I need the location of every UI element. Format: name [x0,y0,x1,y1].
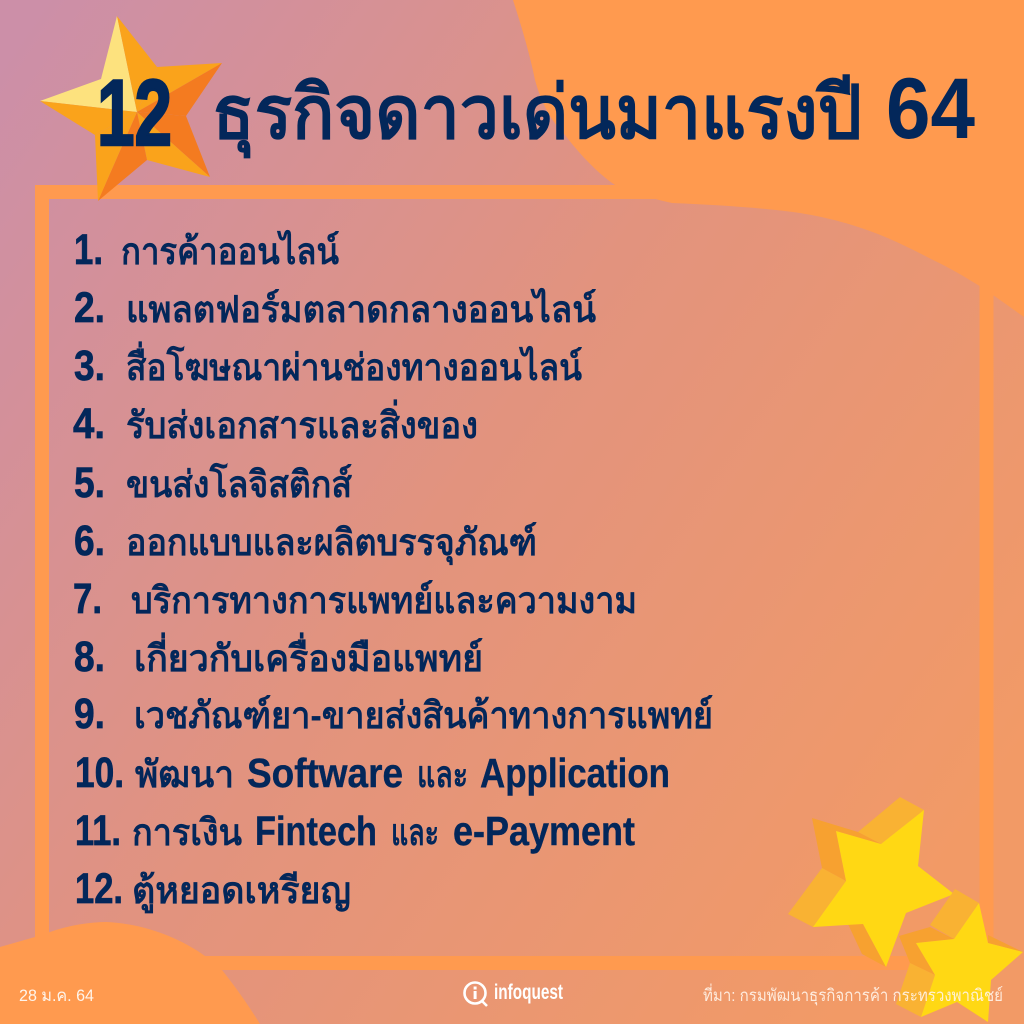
panel frame [42,192,986,963]
item 11: การเงิน [132,812,242,853]
item 5: 5. [74,459,105,507]
item 11: 11. [75,807,121,855]
icon: large yellow 3D star [788,797,954,967]
item 7: บริการทางการแพทย์และความงาม [131,580,637,621]
item 8: 8. [74,633,105,681]
item 4: รับส่งเอกสารและสิ่งของ [126,399,478,446]
orange blob: bottom left [0,922,260,1024]
item 9: เวชภัณฑ์ยา-ขายส่งสินค้าทางการแพทย์ [134,695,713,736]
title: ธุรกิจดาวเด่นมาแรงปี [212,71,862,159]
item 10: และ [417,754,468,795]
title [97,60,975,165]
ranked list of 12 businesses [73,226,713,914]
item 11: e-Payment [453,808,635,854]
item 2: 2. [74,284,105,332]
item 2: แพลตฟอร์มตลาดกลางออนไลน์ [126,287,596,330]
item 6: ออกแบบและผลิตบรรจุภัณฑ์ [126,522,537,566]
item 10: Application [480,750,670,796]
item 11: Fintech [255,808,377,854]
item 1: 1. [74,226,103,274]
title: 64 [886,61,975,157]
item 6: 6. [74,517,105,565]
item 1: การค้าออนไลน์ [121,229,339,272]
icon: faceted star [40,16,222,201]
logo: infoquest [464,981,563,1006]
item 12: ตู้หยอดเหรียญ [132,870,351,914]
item 4: 4. [73,400,105,448]
item 10: Software [247,750,403,796]
item 3: 3. [74,342,105,390]
item 9: 9. [74,690,105,738]
item 7: 7. [73,575,102,623]
orange blob: top right [513,0,1024,317]
item 12: 12. [75,865,123,913]
logo: infoquest: infoquest [494,981,563,1004]
item 10: พัฒนา [135,754,234,795]
item 3: สื่อโฆษณาผ่านช่องทางออนไลน์ [126,341,582,388]
title: 12 [97,60,172,165]
icon: small yellow 3D star [896,889,1023,1022]
item 11: และ [391,812,439,853]
item 8: เกี่ยวกับเครื่องมือแพทย์ [134,632,483,679]
item 10: 10. [75,749,124,797]
date: 28 ม.ค. 64 [19,986,94,1005]
item 5: ขนส่งโลจิสติกส์ [126,462,352,505]
